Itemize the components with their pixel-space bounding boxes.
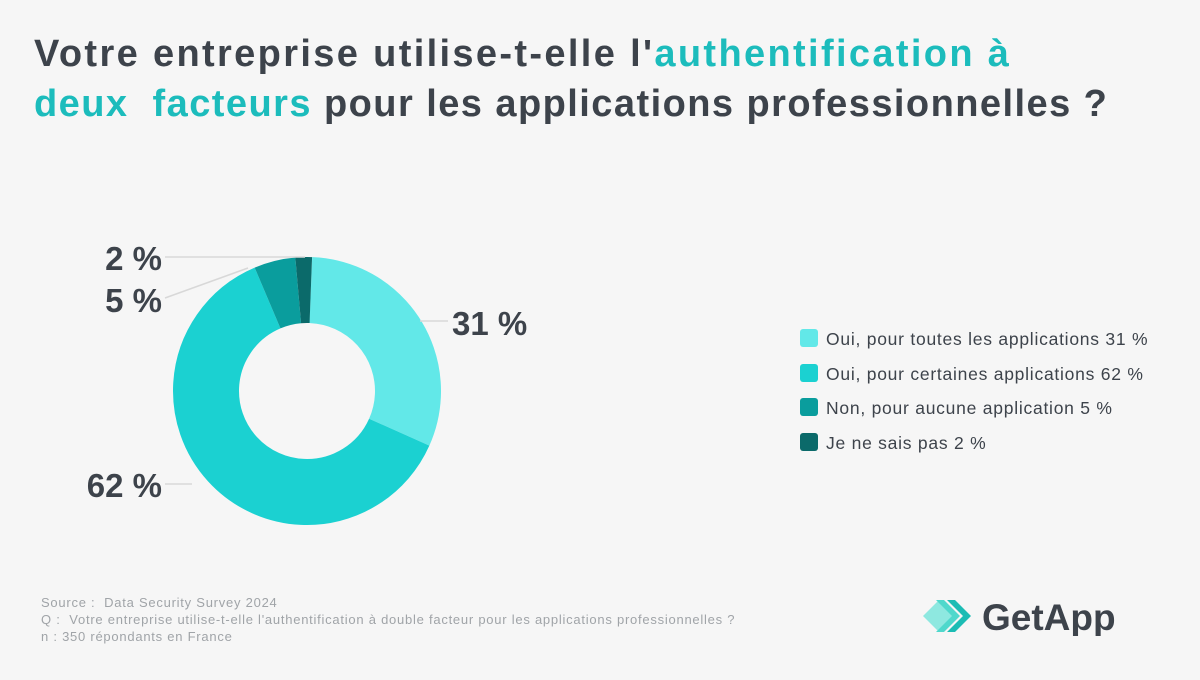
legend: Oui, pour certaines applications 62 %	[826, 364, 1144, 384]
source: Q : Votre entreprise utilise-t-elle l'authentification à double facteur pour les applications professionnelles ?	[41, 612, 735, 627]
donut chart: 62 %	[87, 467, 162, 504]
legend	[800, 329, 1148, 452]
source: Source : Data Security Survey 2024	[41, 595, 278, 610]
legend: Non, pour aucune application 5 %	[826, 398, 1113, 418]
donut chart: 2 %	[105, 240, 162, 277]
title	[34, 33, 1108, 125]
donut chart: 31 %	[452, 305, 527, 342]
legend: Oui, pour toutes les applications 31 %	[826, 329, 1148, 349]
title: Votre entreprise utilise-t-elle l'authentification à	[34, 33, 1011, 75]
donut chart: 5 %	[105, 282, 162, 319]
source: n : 350 répondants en France	[41, 629, 233, 644]
logo	[923, 597, 1116, 636]
legend: Je ne sais pas 2 %	[826, 432, 986, 452]
source	[41, 595, 735, 644]
title: deux facteurs pour les applications professionnelles ?	[34, 83, 1108, 125]
